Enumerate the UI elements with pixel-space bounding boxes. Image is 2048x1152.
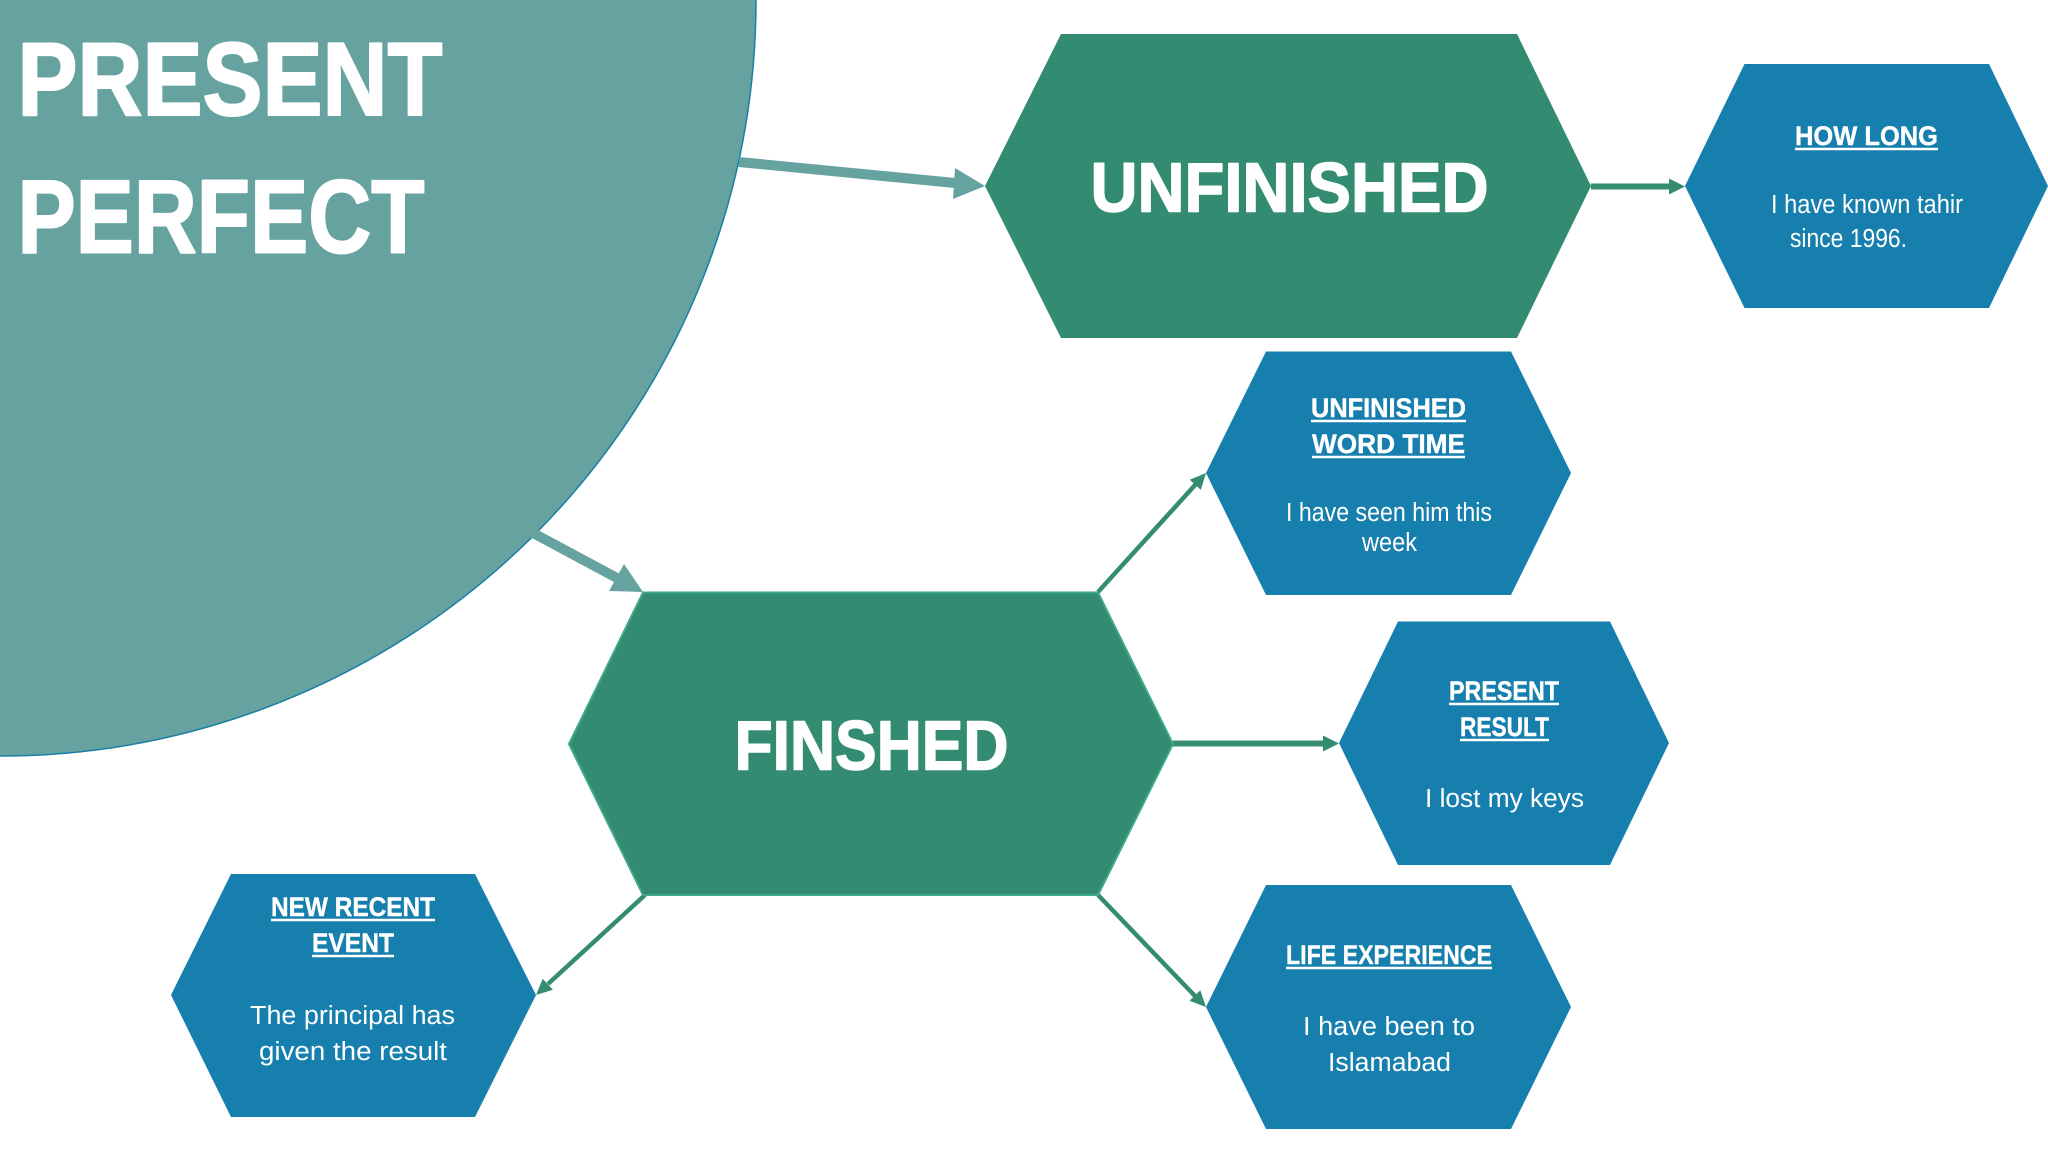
hexagon	[1206, 352, 1571, 595]
hexagon	[985, 34, 1591, 338]
hexagon	[1206, 885, 1571, 1129]
example	[250, 1002, 455, 1066]
arrow: finished to present result	[1173, 736, 1339, 752]
title	[18, 22, 442, 276]
heading: RESULT	[1460, 712, 1549, 742]
title: PERFECT	[18, 160, 424, 276]
heading: PRESENT	[1449, 676, 1559, 706]
panel: life experience	[1206, 885, 1571, 1129]
example	[1286, 499, 1492, 557]
heading: FINSHED	[734, 706, 1008, 784]
heading: HOW LONG	[1795, 121, 1938, 151]
heading: UNFINISHED	[1090, 148, 1488, 226]
quarter circle	[0, 0, 756, 756]
heading	[1449, 676, 1559, 742]
panel: finished	[569, 592, 1173, 895]
panel: how long	[1685, 64, 2048, 308]
panel: unfinished word time	[1206, 352, 1571, 595]
example: I have been to	[1303, 1013, 1475, 1041]
example: I have known tahir	[1771, 191, 1963, 219]
example: I have seen him this	[1286, 499, 1492, 527]
arrow: finished to new recent event	[536, 895, 645, 995]
title: PRESENT	[18, 22, 442, 138]
arrow: unfinished to how long	[1591, 178, 1685, 194]
panel: unfinished	[985, 34, 1591, 338]
arrow: circle to finished	[533, 533, 643, 592]
arrow: finished to life experience	[1098, 895, 1206, 1007]
hexagon	[1685, 64, 2048, 308]
heading: LIFE EXPERIENCE	[1286, 940, 1492, 970]
example	[1771, 191, 1963, 253]
example: since 1996.	[1790, 225, 1907, 253]
example: I lost my keys	[1425, 785, 1584, 813]
heading: EVENT	[312, 928, 394, 958]
example: Islamabad	[1328, 1049, 1451, 1077]
panel: present result	[1339, 622, 1669, 865]
example: given the result	[259, 1038, 447, 1066]
heading: UNFINISHED	[1311, 393, 1466, 423]
heading: WORD TIME	[1312, 429, 1465, 459]
heading: NEW RECENT	[271, 892, 435, 922]
hexagon	[171, 874, 536, 1117]
panel: present perfect circle with title	[0, 0, 756, 756]
example	[1303, 1013, 1475, 1077]
hexagon	[569, 592, 1173, 895]
example: week	[1361, 529, 1417, 557]
heading	[271, 892, 435, 958]
panel: new recent event	[171, 874, 536, 1117]
arrow: circle to unfinished	[739, 162, 985, 199]
heading	[1311, 393, 1466, 459]
arrow: finished to unfinished word time	[1098, 473, 1206, 592]
hexagon	[1339, 622, 1669, 865]
example: The principal has	[250, 1002, 455, 1030]
